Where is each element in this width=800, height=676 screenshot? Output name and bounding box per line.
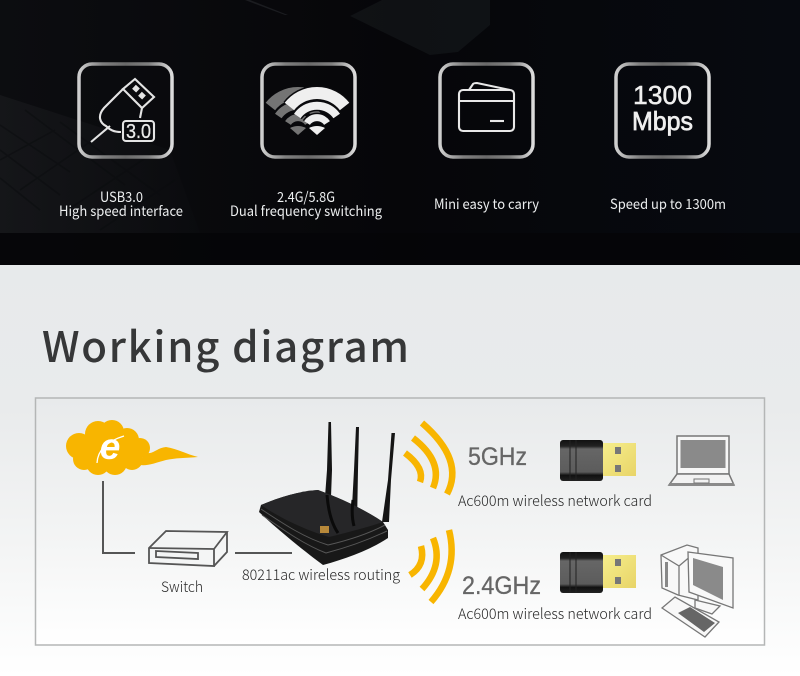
label: dual frequency: Dual frequency switching [230,201,382,221]
feature: dual band wifi [230,64,382,221]
label: 2.4GHz: 2.4GHz [462,572,541,600]
label: router: 80211ac wireless routing [242,564,400,585]
feature: mini [434,64,540,214]
label: dual frequency: 2.4G/5.8G [277,187,335,207]
icon: upper signal waves [405,423,452,494]
label: USB3.0: High speed interface [59,201,183,221]
connector: internet to switch [103,481,135,553]
connector: switch to router [235,552,292,554]
icon: internet cloud: e [100,426,120,467]
icon: USB plug with 3.0 badge: 3.0 [126,121,151,143]
icon: USB plug with 3.0 badge [79,64,172,157]
label: speed: Speed up to 1300m [610,194,726,214]
icon: desktop computer [661,545,733,637]
label: lower adapter: Ac600m wireless network card [458,603,652,624]
feature: speed [610,64,726,214]
icon: upper USB adapter [560,440,636,481]
icon: lower signal waves [410,530,452,602]
label: USB3.0: USB3.0 [100,187,143,207]
icon: card [440,64,533,157]
icon: lower USB adapter [560,552,636,593]
icon: switch [149,531,227,566]
icon: laptop [669,436,734,486]
icon: 1300 Mbps [616,64,709,157]
title: Working diagram [42,314,409,375]
icon: internet cloud [66,420,198,475]
label: switch: Switch [161,576,203,597]
icon: 1300 Mbps: Mbps [632,106,693,136]
panel: network diagram [36,398,764,645]
icon: wireless router [259,422,395,565]
label: mini: Mini easy to carry [434,194,540,214]
label: upper adapter: Ac600m wireless network card [458,490,652,511]
label: 5GHz: 5GHz [468,443,527,471]
icon: double wifi fan [262,64,355,157]
lower section background [0,265,800,676]
dark feature band [0,0,800,265]
icon: 1300 Mbps: 1300 [633,80,692,110]
feature: USB 3.0 [59,64,183,221]
